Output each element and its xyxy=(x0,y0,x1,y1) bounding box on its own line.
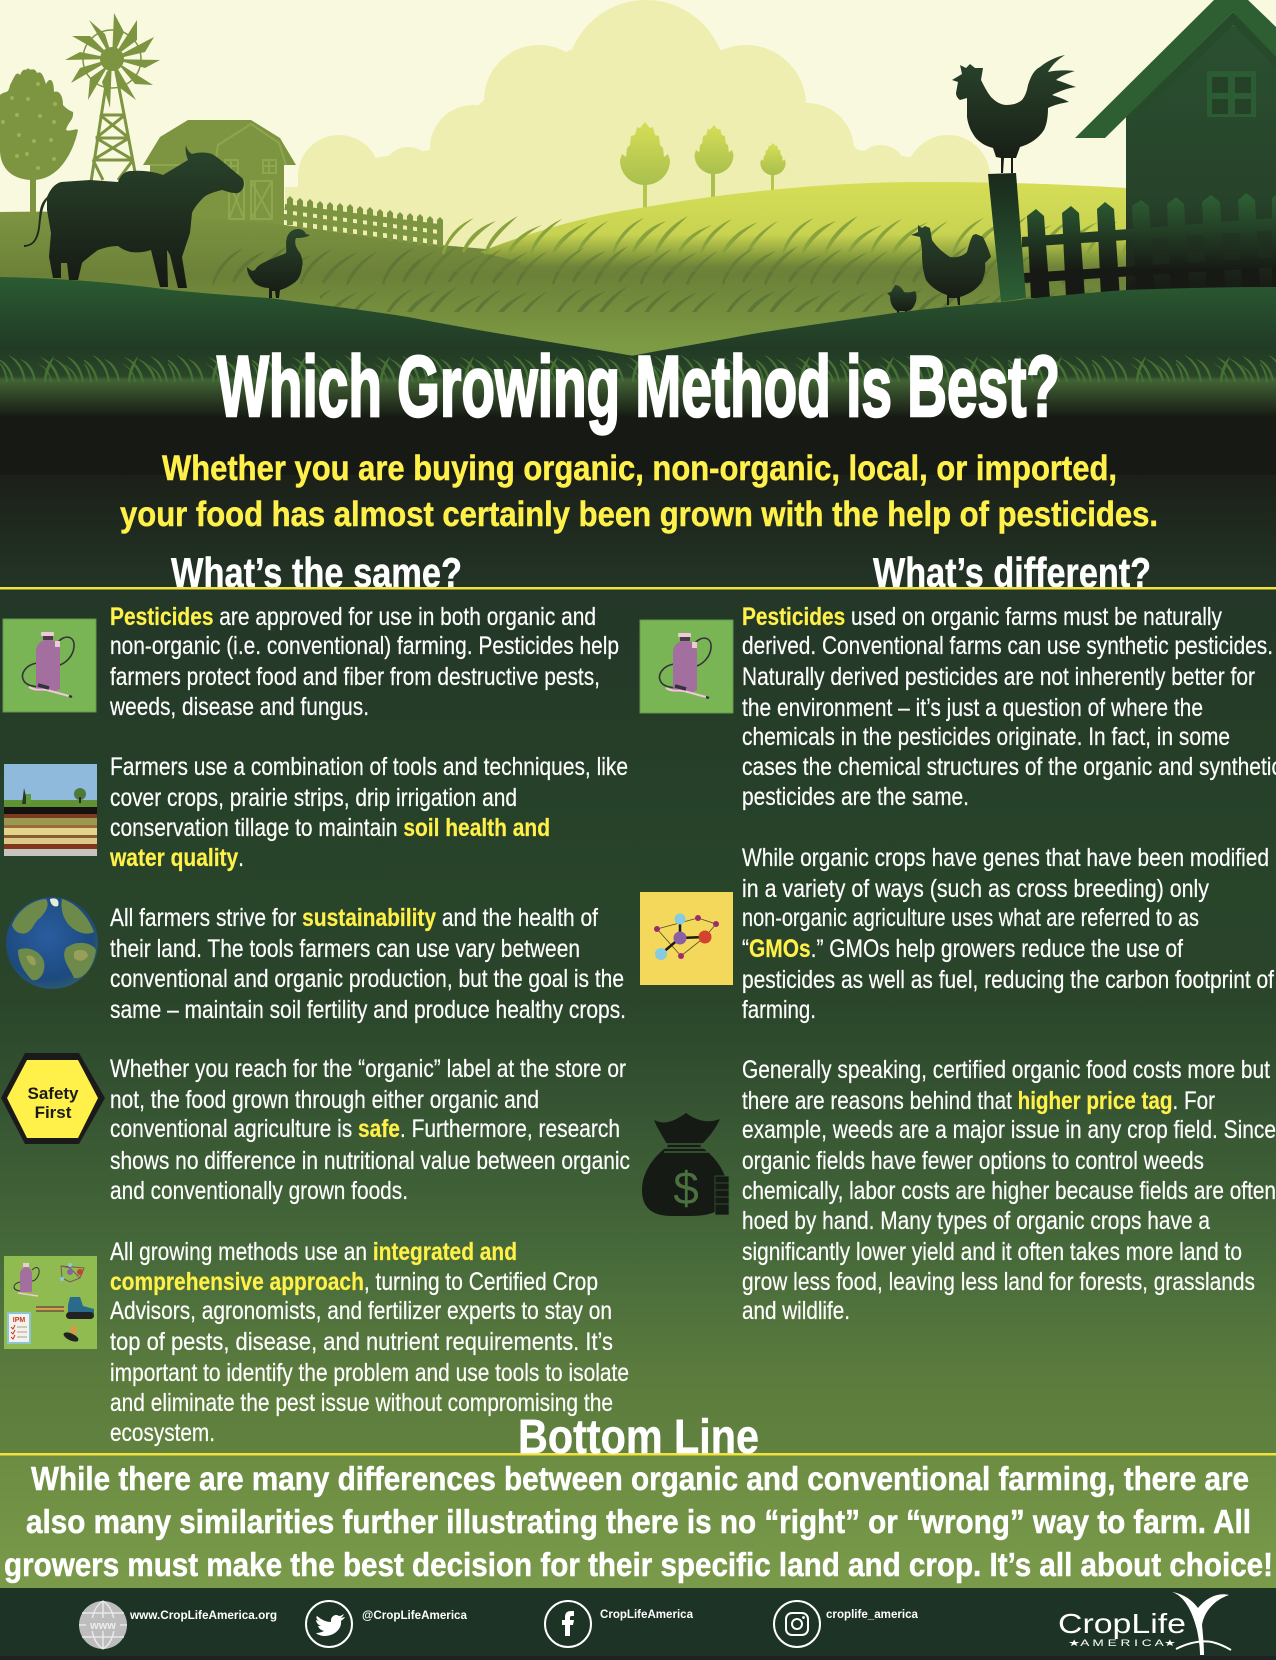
panel: what's different xyxy=(640,603,1276,1325)
icon: safety first sign xyxy=(1,1053,105,1144)
text: integrated approach: top of pests, disease, and nutrient requirements. It’s xyxy=(110,1328,613,1356)
hill: bright xyxy=(480,182,1276,360)
fence post xyxy=(988,173,1026,302)
text: sustainability: their land. The tools farmers can use vary between xyxy=(110,935,580,963)
icon: website globe: www xyxy=(89,1620,116,1632)
text: organic pesticides: pesticides are the same. xyxy=(742,783,969,811)
text: conclusion xyxy=(4,1460,1273,1583)
logo: CropLife America: ★A M E R I C A★ xyxy=(1068,1638,1176,1648)
trees: background xyxy=(620,122,786,209)
icon: integrated pest management: IPM xyxy=(13,1317,25,1324)
text: soil health: Farmers use a combination of tools and techniques, like xyxy=(110,753,628,781)
icon: instagram xyxy=(774,1601,820,1647)
text: higher price tag: there are reasons behind that higher price tag. For xyxy=(742,1087,1215,1115)
text: sustainability: conventional and organic production, but the goal is the xyxy=(110,965,624,993)
logo: CropLife America: CropLife xyxy=(1058,1608,1186,1639)
barn: distant xyxy=(143,120,296,226)
icon: money bag xyxy=(642,1113,729,1216)
text: organic pesticides xyxy=(742,603,1276,811)
fence: foreground xyxy=(1022,193,1276,298)
hill: front left xyxy=(0,277,700,420)
fence: distant xyxy=(283,196,443,247)
text: GMOs xyxy=(742,844,1274,1024)
house xyxy=(1075,0,1276,300)
grass strip: foreground xyxy=(0,355,1276,382)
window xyxy=(1207,71,1256,117)
text: pesticides approved: Pesticides are approved for use in both organic and xyxy=(110,603,596,631)
subheading: your food has almost certainly been grown with the help of pesticides. xyxy=(120,495,1158,534)
text: soil health: water quality. xyxy=(109,844,244,872)
chick xyxy=(887,285,916,313)
heading: bottom line: Bottom Line xyxy=(518,1411,759,1464)
text: integrated approach xyxy=(110,1238,629,1447)
heading: what's different: What’s different? xyxy=(873,549,1151,596)
hill: left olive xyxy=(0,212,640,360)
text: pesticides approved: non-organic (i.e. conventional) farming. Pesticides help xyxy=(110,632,619,660)
text: GMOs: farming. xyxy=(742,996,816,1024)
text: higher price tag xyxy=(742,1056,1276,1325)
text: website: www.CropLifeAmerica.org xyxy=(129,1608,277,1622)
cow xyxy=(24,145,244,288)
windmill xyxy=(65,13,160,182)
icon: money bag: $ xyxy=(673,1162,699,1214)
text: integrated approach: ecosystem. xyxy=(110,1419,215,1447)
text: facebook handle: CropLifeAmerica xyxy=(600,1607,693,1621)
text: GMOs: in a variety of ways (such as cross breeding) only xyxy=(742,875,1209,903)
text: integrated approach: All growing methods use an integrated and xyxy=(110,1238,517,1266)
text: sustainability: All farmers strive for sustainability and the health of xyxy=(110,904,598,932)
subheading: Whether you are buying organic, non-organic, local, or imported, xyxy=(162,449,1117,488)
panel: what's the same xyxy=(1,603,630,1447)
text: GMOs: “GMOs.” GMOs help growers reduce the use of xyxy=(742,935,1183,963)
grass tufts: middle ground xyxy=(210,215,1276,312)
icon: integrated pest management xyxy=(4,1256,97,1349)
tree: left xyxy=(0,68,78,215)
clouds xyxy=(285,0,991,270)
text: integrated approach: comprehensive approach, turning to Certified Crop xyxy=(110,1268,598,1296)
logo: CropLife America xyxy=(1058,1592,1231,1655)
footer xyxy=(0,1588,1276,1660)
icon: website globe xyxy=(79,1601,127,1649)
icon: soil layers xyxy=(4,764,97,856)
farm illustration header xyxy=(0,0,1276,475)
icon: facebook xyxy=(545,1601,591,1647)
text: safe: shows no difference in nutritional value between organic xyxy=(110,1147,630,1175)
hill: front right xyxy=(600,287,1276,420)
text: soil health xyxy=(109,753,628,872)
text: safe xyxy=(110,1055,630,1205)
subheading xyxy=(120,449,1158,534)
icon: twitter xyxy=(306,1601,352,1647)
dark band under grass xyxy=(0,417,1276,475)
panel: bottom line xyxy=(0,1411,1276,1588)
text: sustainability xyxy=(110,904,626,1024)
text: integrated approach: and eliminate the pest issue without compromising the xyxy=(110,1389,613,1417)
icon: earth globe xyxy=(6,897,98,989)
icon: safety first sign: Safety xyxy=(27,1084,79,1103)
icon: molecule xyxy=(640,892,733,985)
text: higher price tag: and wildlife. xyxy=(742,1297,850,1325)
text: soil health: cover crops, prairie strips, drip irrigation and xyxy=(110,784,517,812)
text: pesticides approved xyxy=(109,603,619,721)
text: pesticides approved: farmers protect food and fiber from destructive pests, xyxy=(110,663,600,691)
hen xyxy=(911,225,991,305)
text: twitter handle: @CropLifeAmerica xyxy=(362,1608,467,1622)
text: safe: Whether you reach for the “organic” label at the store or xyxy=(110,1055,626,1083)
text: pesticides approved: weeds, disease and fungus. xyxy=(109,693,369,721)
text: safe: conventional agriculture is safe. Furthermore, research xyxy=(110,1115,620,1143)
rooster xyxy=(952,55,1076,173)
text: integrated approach: important to identify the problem and use tools to isolate xyxy=(110,1359,629,1387)
icon: safety first sign: First xyxy=(35,1103,72,1122)
icon: pesticide sprayer xyxy=(3,619,96,712)
text: sustainability: same – maintain soil fertility and produce healthy crops. xyxy=(110,996,626,1024)
text: instagram handle: croplife_america xyxy=(826,1607,918,1621)
text: integrated approach: Advisors, agronomists, and fertilizer experts to stay on xyxy=(110,1297,612,1325)
text: safe: not, the food grown through either organic and xyxy=(110,1086,539,1114)
text: soil health: conservation tillage to maintain soil health and xyxy=(110,814,550,842)
text: safe: and conventionally grown foods. xyxy=(110,1177,408,1205)
text: organic pesticides: the environment – it’s just a question of where the xyxy=(742,694,1203,722)
icon: pesticide sprayer xyxy=(640,620,733,713)
duck xyxy=(247,229,310,298)
heading: what's the same: What’s the same? xyxy=(171,549,462,596)
